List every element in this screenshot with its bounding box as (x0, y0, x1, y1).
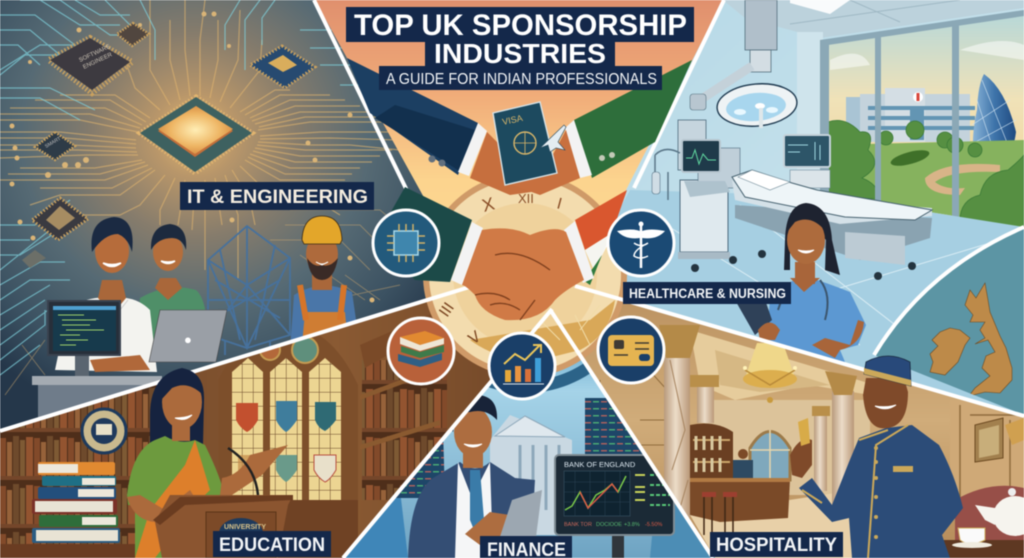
window view (828, 14, 1024, 230)
window frames (820, 10, 1024, 217)
wooden panelling (218, 500, 358, 558)
marble column left (659, 325, 700, 518)
icon: books (388, 318, 454, 384)
chip: small left (35, 132, 75, 160)
wall pillar by window (797, 32, 823, 192)
stack of books (32, 462, 120, 543)
bar shelves (690, 424, 733, 480)
label: education: EDUCATION (219, 535, 325, 556)
lobby ceiling (690, 330, 875, 400)
chip: small top (117, 23, 149, 46)
title banner: A GUIDE FOR INDIAN PROFESSIONALS (386, 71, 657, 88)
wireframe structure (208, 226, 290, 355)
trading monitor: BANK TOR (564, 522, 592, 528)
ticker wall right (585, 398, 720, 558)
label: healthcare and nursing (623, 282, 791, 304)
trading monitor: BANK OF ENGLAND (564, 460, 636, 469)
chip: tiny (22, 250, 46, 268)
person: lecturer (127, 368, 288, 558)
microphone (228, 448, 258, 495)
person: bellhop (790, 356, 963, 558)
circuit nodes (10, 12, 374, 302)
marble column right (825, 371, 857, 511)
ticker wall left (345, 428, 445, 558)
university emblem (82, 409, 126, 453)
panel: IT and engineering (0, 0, 426, 430)
sconce (1005, 418, 1024, 445)
icon: caduceus (608, 210, 674, 276)
anaesthesia machine (652, 120, 740, 272)
handshake: upper left hand (470, 132, 545, 195)
icon: chip (373, 210, 439, 276)
panel: central handshake background (300, 0, 740, 300)
trading monitor: DOCIOOE (596, 522, 622, 528)
handshake: upper navy sleeve (347, 58, 487, 176)
trading monitor: +3.8% (624, 522, 640, 528)
arched doorway (750, 430, 790, 480)
handshake: clasped hands (462, 228, 584, 320)
crest shields (236, 401, 336, 482)
clock face: XII (518, 191, 534, 206)
panel: finance (340, 163, 720, 558)
gothic arch (218, 325, 358, 500)
clock face (423, 173, 627, 377)
vital signs monitor (682, 140, 720, 172)
patient monitor (784, 135, 830, 188)
chip: software engineer: SOFTWARE (78, 44, 111, 64)
person: engineer with hard hat (290, 215, 356, 340)
laptop: ● (184, 332, 192, 347)
left bookshelves (0, 384, 170, 558)
label: IT and engineering (180, 182, 374, 210)
title banner (346, 7, 694, 90)
person: developer in green (140, 224, 206, 339)
floor (618, 190, 1020, 410)
panel: healthcare and nursing (617, 0, 1024, 412)
ceiling (723, 0, 1024, 38)
chip: software engineer (49, 38, 132, 93)
hospital building (846, 88, 975, 143)
icon: growth chart (489, 333, 555, 399)
chandelier (743, 343, 797, 403)
wall panels (950, 400, 1024, 500)
table (930, 540, 1024, 558)
map of UK and Ireland (930, 283, 1012, 396)
chip: central processor (140, 97, 252, 173)
framed painting (975, 418, 1003, 462)
person: developer in white shirt (55, 217, 157, 372)
panel: hospitality (584, 303, 1024, 558)
visa passport (493, 102, 566, 185)
circuit traces (0, 0, 410, 395)
handshake: tricolour sleeve (564, 190, 627, 285)
handshake: lower dark sleeve (375, 187, 483, 285)
chip: blue (250, 46, 315, 88)
label: healthcare and nursing: HEALTHCARE & NURSING (629, 286, 786, 301)
label: hospitality: HOSPITALITY (716, 535, 837, 556)
table (0, 544, 140, 558)
laptop (149, 310, 227, 362)
teapot and cup (952, 488, 1024, 548)
clock face: V (466, 328, 484, 348)
desk (31, 375, 163, 418)
stained glass window (232, 337, 341, 500)
clock face: III (436, 300, 458, 320)
person: financier (408, 395, 542, 558)
title banner: TOP UK SPONSORSHIP (354, 9, 687, 42)
clock face: X (480, 193, 497, 216)
hospital bed (732, 170, 932, 280)
Bank of England building (490, 415, 572, 535)
gherkin tower (972, 74, 1017, 142)
far columns (690, 375, 830, 491)
back wall (705, 400, 870, 495)
chip: small left: SMART (44, 136, 62, 150)
surgical lamp (690, 0, 799, 129)
trading monitor: -5.50% (645, 522, 663, 528)
chip: software engineer: ENGINEER (82, 52, 114, 71)
person: nurse (735, 203, 866, 362)
trading monitor (555, 455, 674, 558)
bar counter (690, 478, 790, 535)
icon: payment card (598, 317, 664, 383)
bartender (733, 449, 753, 482)
lectern: UNIVERSITY (224, 524, 266, 531)
handshake: upper green sleeve (565, 60, 692, 178)
right bookshelves (360, 310, 447, 500)
handshake: upper right hand (512, 130, 580, 195)
label: IT and engineering: IT & ENGINEERING (187, 187, 368, 208)
lectern (153, 495, 293, 558)
chip: lower left (32, 198, 88, 240)
lobby floor (690, 494, 852, 558)
monitor with code (48, 301, 120, 376)
clock face: I (555, 195, 564, 213)
panel: UK map (876, 229, 1024, 414)
hands at keyboard (90, 355, 150, 372)
ring behind clock (413, 163, 637, 387)
panel: education (0, 280, 560, 558)
park (862, 140, 1024, 217)
title banner: INDUSTRIES (434, 38, 606, 69)
visa passport: VISA (501, 113, 523, 127)
sofa (955, 486, 1024, 540)
